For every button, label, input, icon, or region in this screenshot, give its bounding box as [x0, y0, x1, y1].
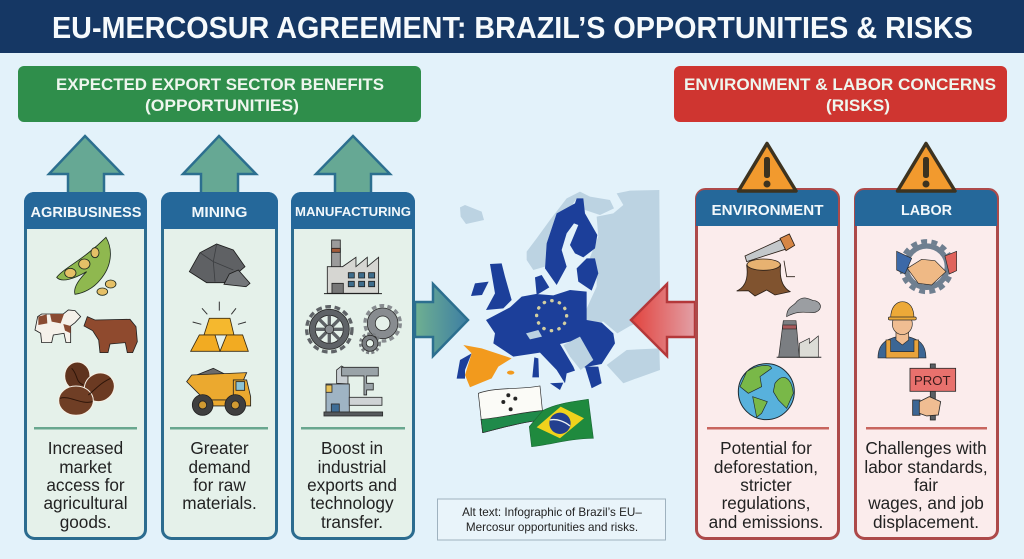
divider [707, 427, 829, 430]
divider [301, 427, 405, 430]
panel: environment [696, 190, 838, 538]
text: agribusiness description: market [59, 457, 112, 477]
icon: coal rock [189, 244, 250, 287]
arrow: into map from opportunities [415, 284, 468, 356]
callout: alt text: Alt text: Infographic of Brazil’s EU– [462, 506, 642, 519]
divider [34, 427, 137, 430]
panel: agribusiness [24, 192, 147, 538]
icon: handshake in gear [897, 241, 957, 292]
arrow: into map from risks [631, 284, 695, 356]
icon: tree stump and saw [737, 234, 795, 296]
title bar: EU-MERCOSUR AGREEMENT: BRAZIL’S OPPORTUNITIES & RISKS [52, 11, 973, 45]
heading: environment: ENVIRONMENT [712, 203, 824, 219]
icon: protest sign [910, 364, 956, 420]
icon: factory [324, 240, 382, 294]
icon: coffee beans [59, 362, 120, 415]
EU member states [457, 198, 615, 390]
arrow: mining up [183, 136, 256, 194]
text: manufacturing description: transfer. [321, 512, 383, 532]
text: mining description: demand [188, 457, 251, 477]
icon: worker [878, 302, 926, 358]
heading: labor: LABOR [901, 203, 953, 219]
icon: dump truck [187, 368, 251, 415]
icon: gold bars [191, 302, 248, 351]
banner: risks [674, 66, 1007, 122]
text: labor description: labor standards, [864, 457, 988, 477]
panel: manufacturing [291, 192, 415, 538]
heading: manufacturing: MANUFACTURING [295, 204, 411, 219]
title bar [0, 0, 1024, 53]
banner: risks: ENVIRONMENT & LABOR CONCERNS [684, 75, 996, 94]
panel: mining [161, 192, 278, 538]
text: mining description: Greater [190, 438, 249, 458]
Balkans [563, 337, 593, 370]
heading: agribusiness: AGRIBUSINESS [30, 205, 142, 221]
icon: soybeans [57, 237, 116, 295]
text: agribusiness description: access for [46, 475, 125, 495]
banner: opportunities: EXPECTED EXPORT SECTOR BENEFITS [56, 75, 384, 94]
non-EU territories [460, 190, 660, 383]
text: manufacturing description: industrial [318, 457, 386, 477]
text: agribusiness description: agricultural [43, 493, 128, 513]
text: mining description: for raw [193, 475, 246, 495]
icon: gears [307, 306, 400, 353]
icon: smokestack [777, 298, 821, 357]
arrow: agribusiness up [49, 136, 122, 194]
icon: globe [738, 364, 794, 420]
text: manufacturing description: Boost in [321, 438, 383, 458]
icon: warning environment [738, 144, 796, 191]
flag: Mercosur [478, 386, 543, 433]
text: manufacturing description: technology [310, 493, 394, 513]
text: agribusiness description: Increased [48, 438, 123, 458]
icon: robot arm [324, 366, 383, 416]
text: environment description: regulations, [722, 493, 810, 513]
callout: alt text [438, 499, 666, 540]
panel: labor [855, 190, 998, 538]
divider [170, 427, 268, 430]
text: labor description: fair [914, 475, 938, 495]
flag: Brazil [529, 399, 593, 447]
arrow: manufacturing up [316, 136, 390, 194]
Switzerland [526, 330, 542, 339]
callout: alt text: Mercosur opportunities and risks. [466, 521, 638, 534]
text: environment description: stricter [740, 475, 792, 495]
Spain [463, 345, 512, 387]
divider [866, 427, 987, 430]
text: environment description: and emissions. [709, 512, 823, 532]
heading: mining: MINING [192, 205, 248, 221]
text: agribusiness description: goods. [60, 512, 111, 532]
icon: cattle [35, 310, 137, 353]
text: labor description: Challenges with [865, 438, 987, 458]
icon: warning labor [898, 144, 955, 191]
map: Europe [457, 190, 660, 390]
banner: risks: (RISKS) [826, 96, 890, 115]
icon: protest sign: PROT [914, 373, 951, 388]
text: environment description: Potential for [720, 438, 812, 458]
text: mining description: materials. [182, 493, 257, 513]
EU stars [537, 301, 567, 331]
text: environment description: deforestation, [714, 457, 818, 477]
banner: opportunities [18, 66, 421, 122]
text: manufacturing description: exports and [307, 475, 397, 495]
text: labor description: wages, and job [867, 493, 984, 513]
banner: opportunities: (OPPORTUNITIES) [145, 96, 299, 115]
text: labor description: displacement. [873, 512, 979, 532]
